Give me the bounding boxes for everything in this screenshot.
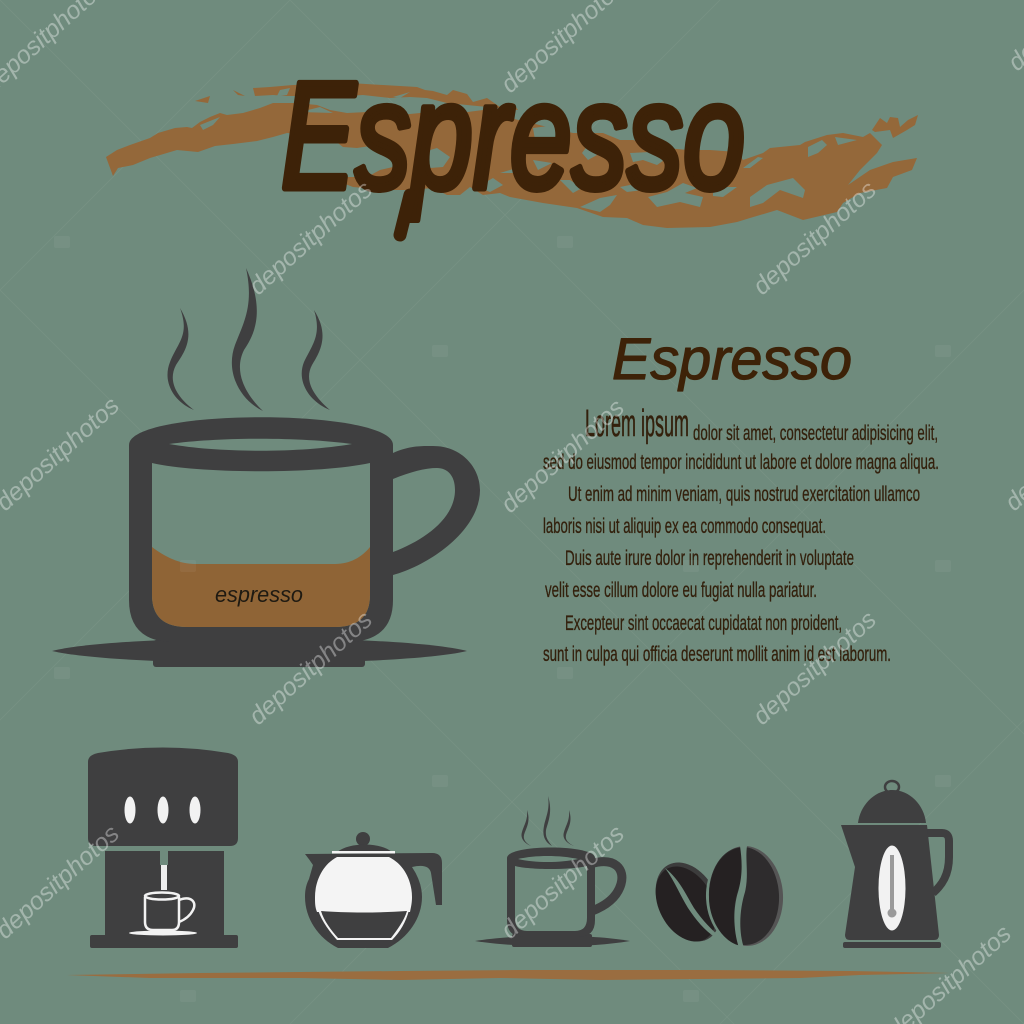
title: Espresso (281, 51, 745, 221)
body text: laboris nisi ut aliquip ex ea commodo consequat. (543, 515, 826, 538)
icon: glass coffee carafe (305, 832, 442, 948)
steam (167, 268, 330, 411)
cup rim opening (169, 439, 352, 451)
saucer (52, 638, 467, 667)
cup handle (393, 446, 480, 575)
coffee fill (152, 547, 370, 627)
body text: Lorem ipsum (585, 403, 689, 445)
icon: small coffee cup (475, 796, 630, 947)
watermark: depositphotos (747, 176, 882, 301)
espresso label: espresso (215, 582, 303, 607)
icon: espresso machine (88, 748, 238, 948)
icon: coffee pot (841, 781, 949, 948)
watermark: depositphotos (747, 606, 882, 731)
bottom brush stroke (67, 970, 950, 980)
watermark: depositphotos (243, 176, 378, 301)
body text (543, 403, 939, 666)
body text: Excepteur sint occaecat cupidatat non proident, (565, 612, 842, 635)
large coffee cup illustration (52, 268, 480, 667)
subheading: Espresso (612, 327, 852, 392)
body text: Duis aute irure dolor in reprehenderit in voluptate (565, 547, 854, 570)
watermark: depositphotos (495, 394, 630, 519)
title (281, 51, 745, 235)
cup body (129, 417, 393, 642)
brush stroke behind title (106, 83, 918, 228)
brush stroke gaps (200, 88, 857, 212)
body text: velit esse cillum dolore eu fugiat nulla pariatur. (545, 579, 817, 602)
icon: coffee beans (643, 844, 787, 953)
watermark: depositphotos (243, 606, 378, 731)
watermark: depositphotos (495, 820, 630, 945)
